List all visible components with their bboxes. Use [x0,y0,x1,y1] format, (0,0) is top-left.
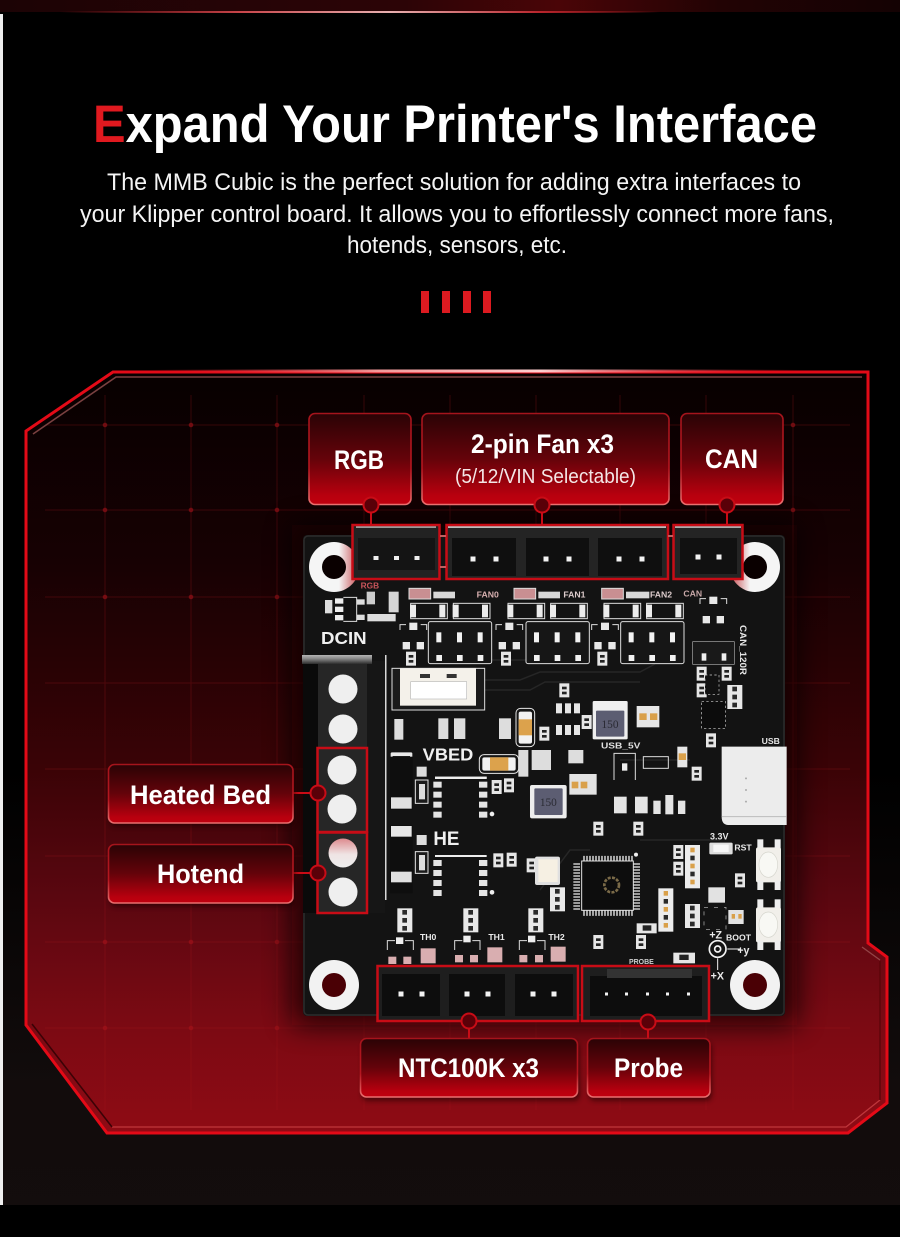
label: CAN: CAN [705,444,758,474]
orange capacitor [516,708,535,747]
silkscreen upper labels: VBED [423,745,473,765]
silkscreen lower labels: TH0 [420,932,437,942]
connector: NTC thermistors [378,966,578,1021]
board components upper half [321,580,780,780]
second inductor 150 [530,785,567,818]
label: Hotend: Hotend [157,859,244,889]
axis symbol [709,941,740,970]
second inductor 150: 150 [540,797,557,809]
label: 2-pin Fan x3: 2-pin Fan x3 [471,429,614,459]
panel inner line [33,377,862,434]
usb power regulator [556,703,580,735]
resistor stacks [550,887,565,911]
title: Expand Your Printer's Interface [93,95,817,154]
connector: CAN [674,525,742,579]
panel grid [45,395,850,1110]
hotend terminal highlight [318,832,367,913]
intro text: your Klipper control board. It allows you to effortlessly connect more fans, [80,201,834,228]
top border highlight [150,370,800,372]
label: Heated Bed [108,764,293,823]
silkscreen lower labels: +X [711,970,725,982]
board components lower half [387,747,787,982]
silkscreen upper labels: FAN0 [477,590,499,600]
orange capacitor horizontal [479,755,519,773]
he mosfet block [390,825,428,893]
vbed chip [391,750,583,779]
silkscreen lower labels: TH1 [488,932,505,942]
label: 2-pin Fan x3: (5/12/VIN Selectable) [455,466,636,488]
connector links between sockets [440,536,673,567]
board shadow [292,525,797,1025]
usb-c connector [722,747,787,825]
inductor 150 [593,701,628,739]
mounting hole bottom-right [730,960,780,1010]
usb side switch chip [693,642,734,728]
capacitor pair [637,706,659,727]
intro text: The MMB Cubic is the perfect solution for adding extra interfaces to [107,169,801,196]
callout leader lines [293,505,727,1038]
mcu chip [577,853,638,913]
panel: interface diagram [26,371,887,1133]
small parts [593,822,603,836]
crystal [535,857,560,885]
usb5v jumper [614,747,687,780]
transistors [400,623,427,649]
fan jumper pads [409,588,623,599]
silkscreen lower labels: TH2 [548,932,565,942]
small switching diodes row [614,795,685,814]
top red band [0,0,900,13]
he driver ic [433,855,494,896]
thermistor filter parts [387,936,566,964]
capacitor pair lower [569,774,597,795]
silkscreen upper labels: RGB [361,580,379,590]
circuit board [302,525,787,1021]
silkscreen lower labels [420,831,752,982]
small resistors [406,652,416,666]
silkscreen lower labels: +y [737,945,750,957]
label: 2-pin Fan x3 [422,414,669,504]
terminal block DCIN [302,655,386,913]
silkscreen upper labels: CAN_120R [738,625,748,676]
fan mosfet switches [410,603,447,619]
mounting hole top-right [730,542,780,592]
label: RGB: RGB [334,445,384,475]
RGB driver chip [325,592,399,621]
mounting hole bottom-left [309,960,359,1010]
label: CAN [681,414,783,504]
label shadows [110,768,712,1101]
panel outer border [26,372,887,1133]
button RST [756,839,781,890]
pcb traces [465,640,720,890]
small parts near probe [637,887,744,963]
callout dots [310,498,734,1030]
connector: 2-pin fans [446,525,668,579]
four red bars divider [421,291,491,313]
inductor 150: 150 [601,719,619,731]
connector: Probe [582,966,709,1021]
vbed driver ic [433,777,494,818]
intro text [80,169,834,259]
connector: RGB [352,525,440,579]
label: Probe: Probe [614,1053,683,1083]
mounting hole top-left [309,542,359,592]
power row pads [394,718,511,740]
silkscreen upper labels [321,580,780,765]
HE label: HE [433,829,459,850]
silkscreen lower labels: 3.3V [710,831,728,841]
vbed mosfet block [390,757,428,810]
label: NTC100K x3 [360,1038,578,1097]
silkscreen upper labels: CAN [683,589,702,599]
left white edge strip [0,14,3,1205]
heated bed terminal highlight [318,748,367,832]
silkscreen upper labels: USB_5V [601,741,641,751]
bottom black band [0,1205,900,1237]
silkscreen upper labels: FAN2 [650,589,672,599]
label: RGB [309,414,411,504]
silkscreen upper labels: DCIN [321,628,367,648]
label: Probe [588,1038,710,1097]
silkscreen lower labels: +Z [709,929,723,941]
button BOOT [756,899,781,950]
3.3V led [709,843,733,854]
label: Heated Bed: Heated Bed [130,780,271,810]
label: NTC100K x3: NTC100K x3 [398,1053,539,1083]
fan voltage headers [428,622,492,664]
intro text: hotends, sensors, etc. [347,232,567,259]
silkscreen lower labels: PROBE [629,959,654,966]
terminal screws [328,674,358,906]
silkscreen upper labels: USB [762,736,780,746]
silkscreen lower labels: RST [734,843,752,853]
DC power connector latch [392,668,485,710]
silkscreen lower labels: BOOT [726,932,752,942]
label: Hotend [108,844,293,903]
silkscreen upper labels: FAN1 [563,589,586,599]
